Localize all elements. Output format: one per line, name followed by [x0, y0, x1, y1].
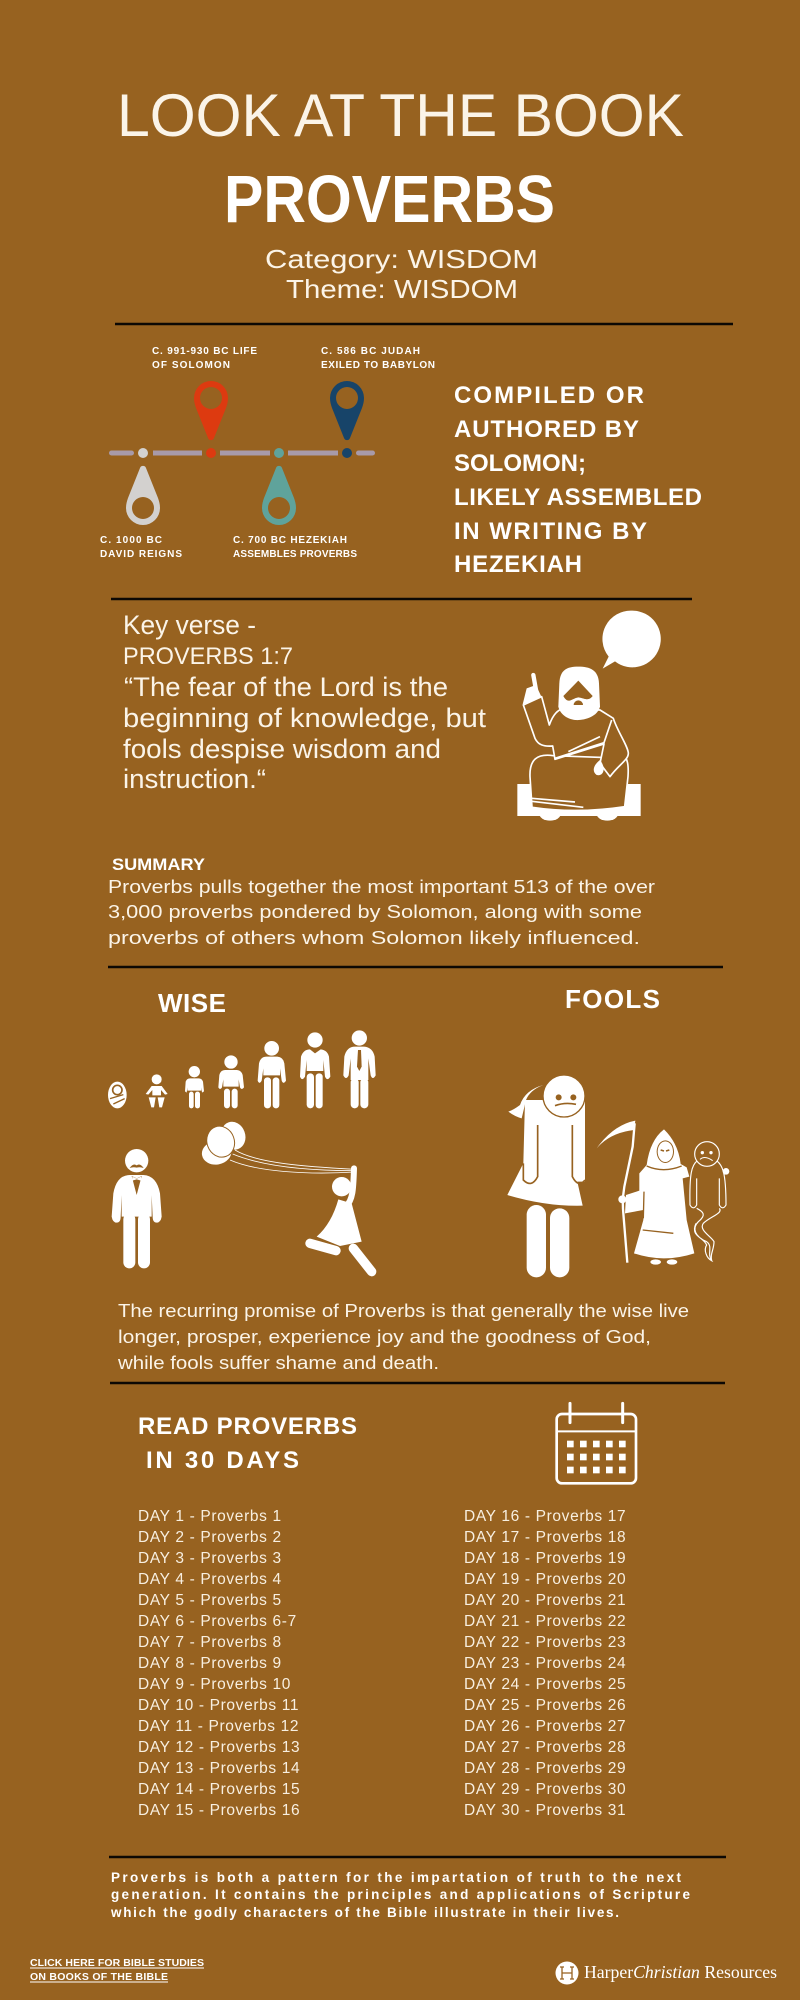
title: PROVERBS	[224, 162, 555, 237]
wise and fools text: The recurring promise of Proverbs is that generally the wise live	[118, 1300, 689, 1321]
key verse: “The fear of the Lord is the	[124, 672, 448, 702]
reaper with scythe	[597, 1121, 694, 1265]
reading plan: days 1 to 15: DAY 10 - Proverbs 11	[138, 1697, 299, 1714]
reading plan: days 16 to 30: DAY 23 - Proverbs 24	[464, 1655, 626, 1672]
pin: Hezekiah	[262, 466, 296, 525]
category and theme: Theme: WISDOM	[286, 274, 518, 304]
woman	[507, 1075, 585, 1277]
reading plan: days 1 to 15: DAY 6 - Proverbs 6-7	[138, 1613, 297, 1630]
reading plan: days 1 to 15: DAY 12 - Proverbs 13	[138, 1739, 300, 1756]
reading plan: days 16 to 30: DAY 18 - Proverbs 19	[464, 1550, 626, 1567]
category and theme: Category: WISDOM	[265, 244, 538, 274]
link: bible studies: CLICK HERE FOR BIBLE STUDIES	[30, 1957, 204, 1969]
reading plan: days 1 to 15: DAY 5 - Proverbs 5	[138, 1592, 282, 1609]
wise and fools text	[117, 1300, 689, 1373]
reading plan: days 1 to 15: DAY 9 - Proverbs 10	[138, 1676, 291, 1693]
pin: Solomon	[194, 381, 228, 440]
logo: HarperChristian Resources: HarperChristian Resources	[584, 1962, 777, 1982]
label: Solomon	[152, 346, 257, 371]
icon: teacher with speech bubble	[517, 611, 661, 821]
gentleman with moustache	[112, 1149, 162, 1268]
closing note	[110, 1870, 690, 1920]
summary text	[108, 876, 655, 948]
reading plan: days 1 to 15: DAY 13 - Proverbs 14	[138, 1760, 300, 1777]
reading plan: days 1 to 15: DAY 1 - Proverbs 1	[138, 1508, 282, 1525]
wise and fools text: longer, prosper, experience joy and the goodness of God,	[118, 1326, 651, 1347]
heading: fools: FOOLS	[565, 984, 660, 1014]
pin: Babylon	[330, 381, 364, 440]
category and theme	[265, 244, 538, 304]
reading plan: days 1 to 15: DAY 2 - Proverbs 2	[138, 1529, 282, 1546]
authorship text: IN WRITING BY	[454, 518, 647, 545]
older child	[218, 1055, 244, 1108]
heading: read proverbs in 30 days: IN 30 DAYS	[146, 1447, 299, 1474]
reading plan: days 16 to 30: DAY 20 - Proverbs 21	[464, 1592, 626, 1609]
label: Babylon: EXILED TO BABYLON	[321, 360, 435, 371]
key verse: Key verse -	[123, 610, 256, 640]
balloons	[199, 1118, 355, 1173]
label: Hezekiah: ASSEMBLES PROVERBS	[233, 549, 357, 560]
reading plan: days 16 to 30: DAY 16 - Proverbs 17	[464, 1508, 626, 1525]
authorship text: SOLOMON;	[454, 450, 586, 477]
reading plan: days 1 to 15	[138, 1508, 300, 1819]
reading plan: days 16 to 30: DAY 28 - Proverbs 29	[464, 1760, 626, 1777]
reading plan: days 1 to 15: DAY 4 - Proverbs 4	[138, 1571, 282, 1588]
reading plan: days 16 to 30: DAY 24 - Proverbs 25	[464, 1676, 626, 1693]
reading plan: days 16 to 30: DAY 25 - Proverbs 26	[464, 1697, 626, 1714]
title	[117, 82, 684, 237]
reading plan: days 1 to 15: DAY 3 - Proverbs 3	[138, 1550, 282, 1567]
key verse: instruction.“	[123, 764, 266, 794]
heading: read proverbs in 30 days: READ PROVERBS	[138, 1413, 357, 1440]
young man	[300, 1032, 330, 1108]
reading plan: days 1 to 15: DAY 14 - Proverbs 15	[138, 1781, 300, 1798]
label: Hezekiah: C. 700 BC HEZEKIAH	[233, 535, 347, 546]
key verse: fools despise wisdom and	[123, 734, 441, 764]
key verse: PROVERBS 1:7	[123, 643, 293, 670]
label: David: DAVID REIGNS	[100, 549, 182, 560]
reading plan: days 1 to 15: DAY 11 - Proverbs 12	[138, 1718, 299, 1735]
reading plan: days 1 to 15: DAY 7 - Proverbs 8	[138, 1634, 282, 1651]
reading plan: days 16 to 30: DAY 26 - Proverbs 27	[464, 1718, 626, 1735]
reading plan: days 16 to 30: DAY 19 - Proverbs 20	[464, 1571, 626, 1588]
heading: read proverbs in 30 days	[138, 1413, 357, 1474]
authorship text: LIKELY ASSEMBLED	[454, 484, 702, 511]
reading plan: days 16 to 30: DAY 27 - Proverbs 28	[464, 1739, 626, 1756]
authorship text: AUTHORED BY	[454, 416, 639, 443]
label: Babylon: C. 586 BC JUDAH	[321, 346, 420, 357]
key verse: beginning of knowledge, but	[123, 703, 487, 733]
reading plan: days 16 to 30: DAY 30 - Proverbs 31	[464, 1802, 626, 1819]
summary heading: SUMMARY	[112, 855, 206, 874]
label: David: C. 1000 BC	[100, 535, 162, 546]
reading plan: days 1 to 15: DAY 15 - Proverbs 16	[138, 1802, 300, 1819]
pin: David	[126, 466, 160, 525]
reading plan: days 16 to 30: DAY 21 - Proverbs 22	[464, 1613, 626, 1630]
teenager	[258, 1041, 286, 1108]
girl with balloons	[310, 1168, 372, 1272]
timeline chart	[100, 346, 435, 560]
speech bubble	[602, 611, 661, 669]
heading: wise: WISE	[158, 988, 226, 1018]
baby	[146, 1074, 168, 1107]
reading plan: days 16 to 30	[464, 1508, 626, 1819]
label: Babylon	[321, 346, 435, 371]
man with tie	[343, 1030, 376, 1108]
closing note: Proverbs is both a pattern for the impartation of truth to the next	[111, 1870, 681, 1885]
reading plan: days 16 to 30: DAY 29 - Proverbs 30	[464, 1781, 626, 1798]
swaddled baby	[108, 1082, 127, 1108]
label: David	[100, 535, 182, 560]
authorship text	[454, 382, 702, 578]
link: bible studies	[30, 1957, 204, 1983]
summary text: Proverbs pulls together the most important 513 of the over	[108, 876, 655, 897]
reading plan: days 16 to 30: DAY 17 - Proverbs 18	[464, 1529, 626, 1546]
summary text: proverbs of others whom Solomon likely influenced.	[108, 927, 640, 948]
label: Solomon: C. 991-930 BC LIFE	[152, 346, 257, 357]
reading plan: days 16 to 30: DAY 22 - Proverbs 23	[464, 1634, 626, 1651]
reading plan: days 1 to 15: DAY 8 - Proverbs 9	[138, 1655, 282, 1672]
timeline bar	[109, 450, 375, 456]
icon: calendar	[557, 1403, 636, 1483]
icon: growing up figures and wise people	[108, 1030, 376, 1272]
summary text: 3,000 proverbs pondered by Solomon, along with some	[108, 901, 642, 922]
child	[185, 1066, 204, 1108]
ghost	[690, 1142, 729, 1261]
title: LOOK AT THE BOOK	[117, 82, 684, 149]
icon: fools figures	[507, 1075, 729, 1277]
label: Solomon: OF SOLOMON	[152, 360, 230, 371]
closing note: which the godly characters of the Bible illustrate in their lives.	[110, 1905, 619, 1920]
closing note: generation. It contains the principles and applications of Scripture	[111, 1887, 690, 1902]
key verse	[123, 610, 487, 794]
wise and fools text: while fools suffer shame and death.	[117, 1352, 439, 1373]
authorship text: COMPILED OR	[454, 382, 644, 409]
label: Hezekiah	[233, 535, 357, 560]
timeline dots	[138, 448, 352, 458]
authorship text: HEZEKIAH	[454, 551, 582, 578]
link: bible studies: ON BOOKS OF THE BIBLE	[30, 1971, 168, 1983]
